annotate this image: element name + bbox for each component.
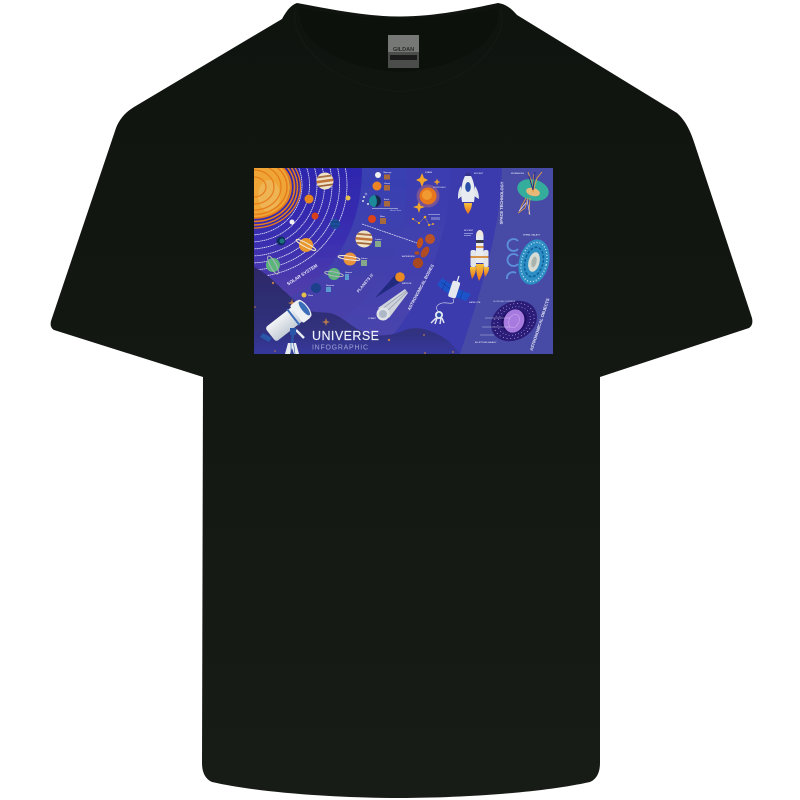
planet: Jupiter: Jupiter: [375, 238, 382, 241]
rocket one: [458, 172, 484, 214]
planet: Mars: Mars: [380, 215, 386, 218]
comet: COMET: [368, 318, 377, 320]
planet: Venus: Venus: [384, 183, 391, 185]
heading: astronomical bodies: ASTRONOMICAL BODIES: [406, 263, 435, 311]
satellite: [437, 276, 481, 304]
neck label: Gildan: GILDAN: [393, 47, 414, 53]
planet: Saturn: Saturn: [361, 257, 368, 260]
stars: STARS: [425, 171, 433, 174]
heading: astronomical objects: ASTRONOMICAL OBJECTS: [529, 297, 551, 351]
elliptical galaxy: GLOBULAR CLUSTERS: [493, 300, 516, 303]
background bands: [254, 168, 502, 354]
telescope: [260, 297, 314, 354]
hill stars: [254, 282, 454, 354]
spiral galaxy: SPIRAL GALAXY: [523, 234, 541, 236]
meteor: [375, 272, 412, 298]
satellite: SATELLITE: [469, 301, 481, 304]
astronaut: [431, 299, 454, 324]
solar system planets: [266, 171, 350, 275]
rocket two: ROCKET: [464, 230, 474, 232]
orbits: [254, 168, 348, 276]
elliptical galaxy: [475, 300, 537, 343]
planet: Pluto: Pluto: [308, 294, 314, 297]
collar rib: [295, 8, 502, 92]
stars: [413, 171, 447, 213]
planet: Earth: Moon Phase: [390, 210, 402, 212]
wormhole: [511, 172, 551, 215]
heading: solar system: SOLAR SYSTEM: [286, 263, 319, 287]
title: universe: UNIVERSE: [312, 329, 379, 343]
subtitle: infographic: INFOGRAPHIC: [312, 344, 368, 352]
constellation: [412, 214, 440, 226]
wormhole: WORMHOLE: [511, 173, 525, 175]
asteroids: [402, 234, 435, 268]
heading: space technology: SPACE TECHNOLOGY: [499, 181, 504, 224]
comet: [368, 289, 408, 320]
divider line: [362, 224, 417, 243]
neck label: Gildan: [388, 35, 419, 68]
elliptical galaxy: ELLIPTICAL GALAXY: [475, 341, 497, 344]
planets section: [302, 171, 417, 298]
stars: SUPERGIANT: [433, 186, 447, 189]
rocket one: ROCKET: [474, 173, 484, 175]
meteor: METEOR: [402, 283, 412, 285]
heading: planets: PLANETS ///: [356, 272, 375, 294]
rocket two: [464, 230, 489, 281]
planet: Earth: Earth: [384, 198, 390, 201]
galaxy gauges: [507, 239, 518, 279]
asteroids: ASTEROIDS: [402, 255, 415, 258]
planet: Earth: [362, 193, 402, 212]
sun: [254, 168, 302, 229]
planet: Mercury: Mercury: [384, 171, 392, 174]
hill foreground: [254, 267, 460, 354]
planet: Neptune: Neptune: [326, 284, 335, 287]
spiral galaxy: [518, 234, 550, 285]
printed universe infographic: [254, 168, 553, 354]
planet: Uranus: Uranus: [345, 271, 353, 274]
